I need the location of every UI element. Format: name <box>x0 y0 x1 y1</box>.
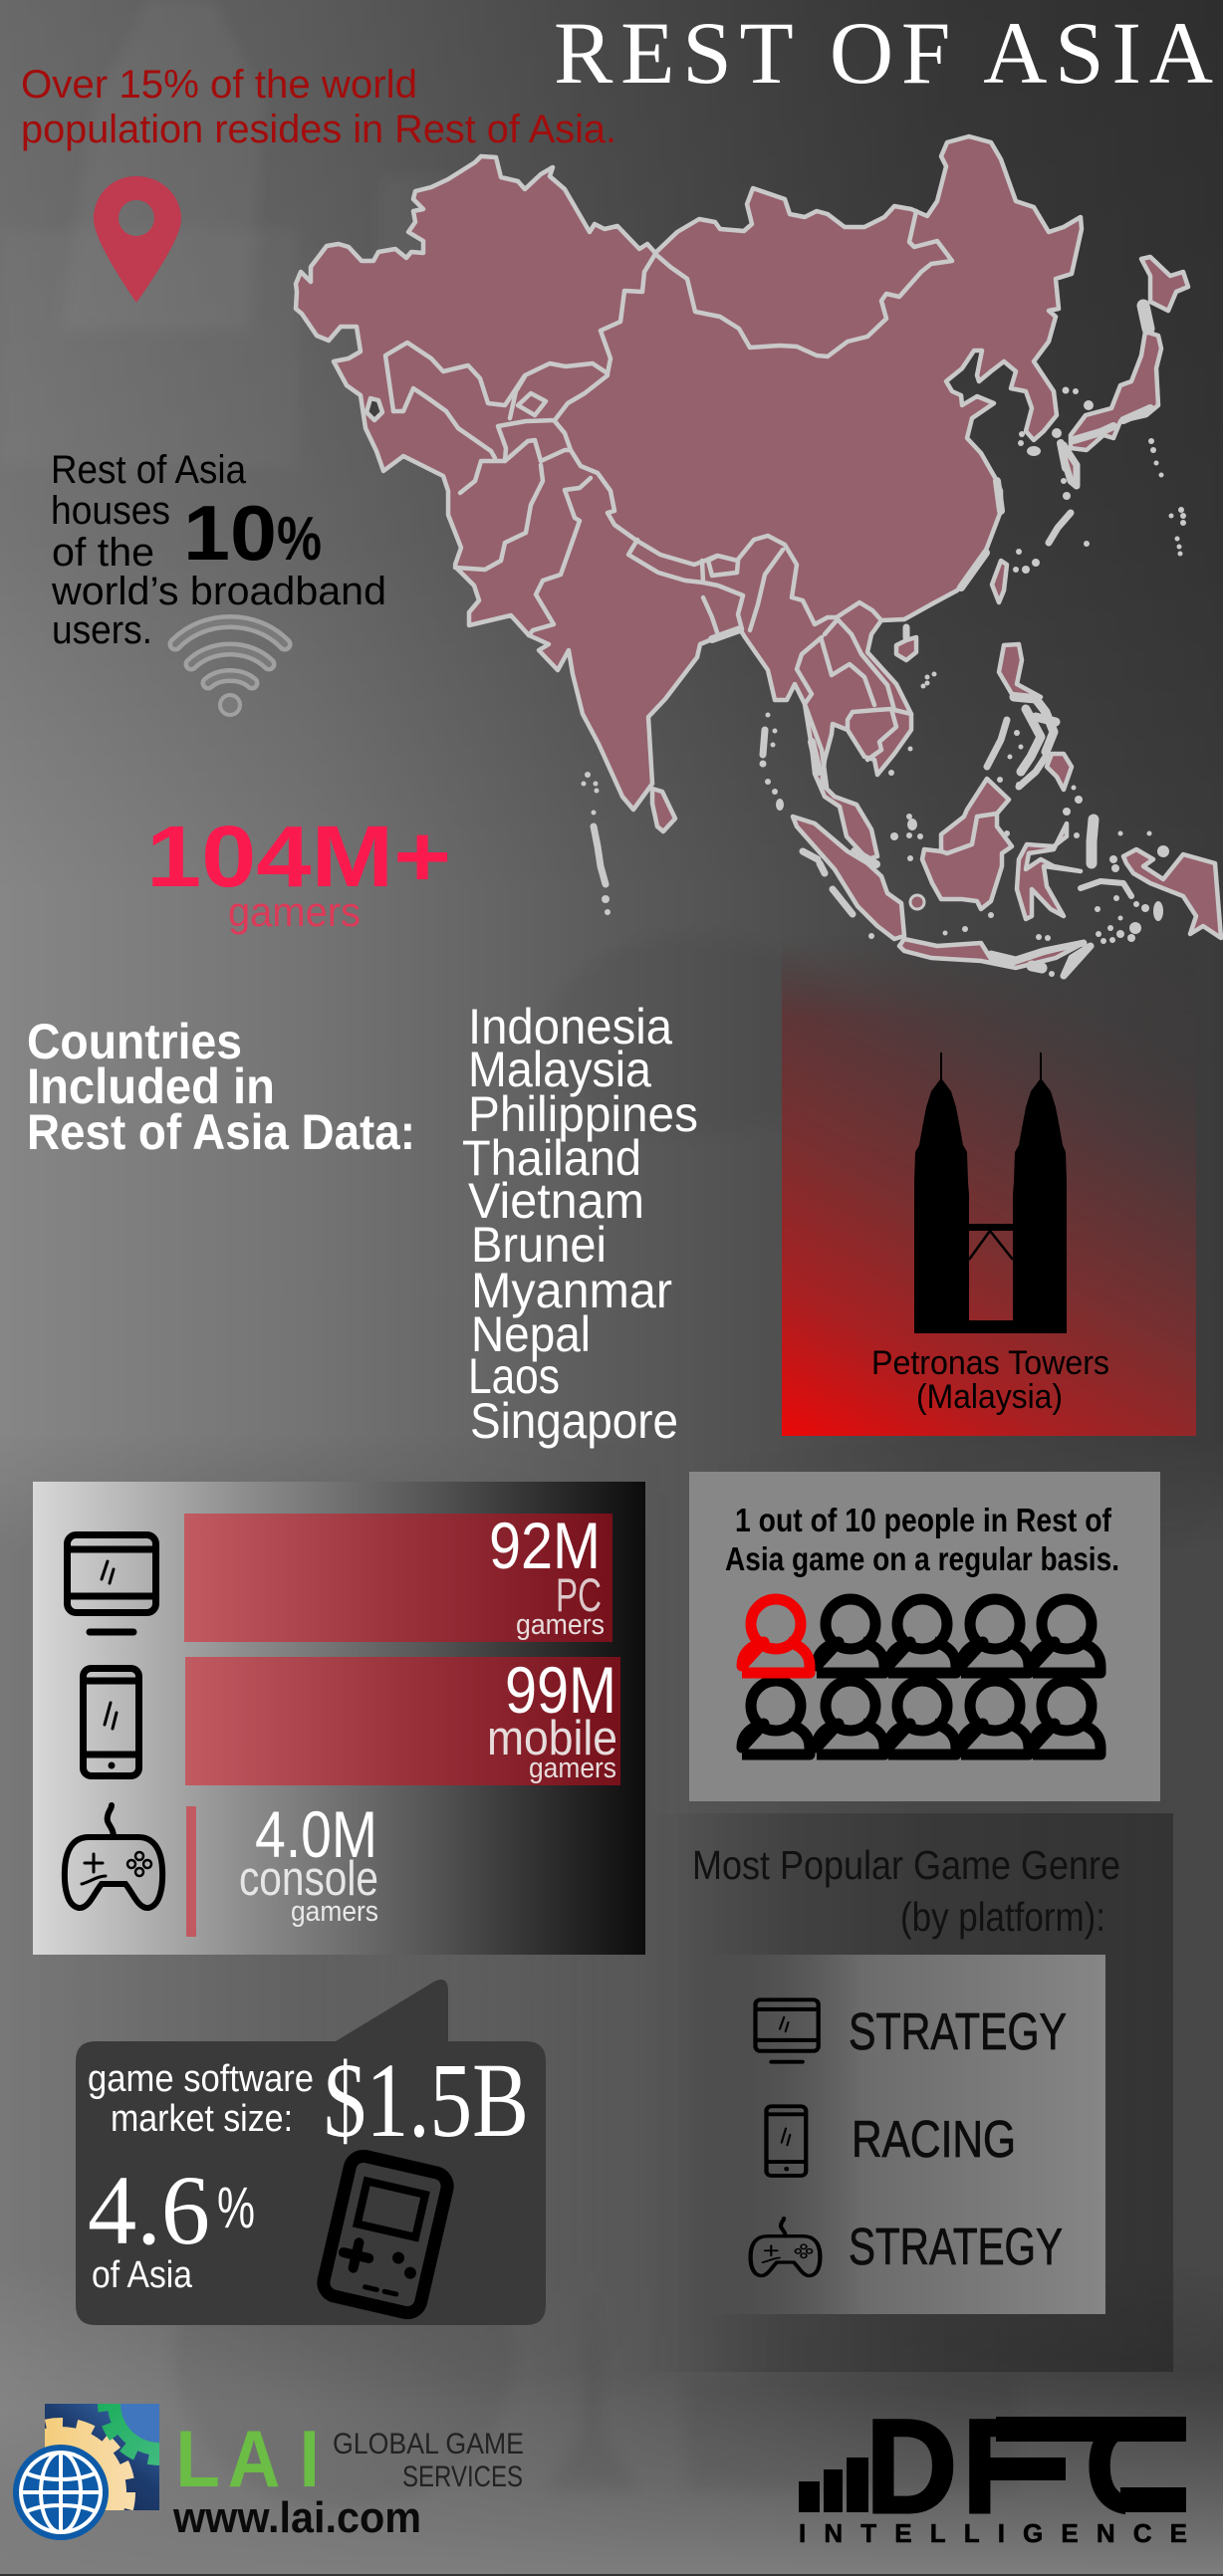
icon: wifi signal <box>175 621 285 715</box>
bar: PC gamers: gamers <box>516 1609 605 1641</box>
panel: gamers by platform <box>33 1482 645 1955</box>
map of Asia <box>296 136 1221 977</box>
icon: PC monitor small <box>755 1999 819 2062</box>
logo: LAI Global Game Services: GLOBAL GAME <box>333 2428 524 2460</box>
caption: Petronas Towers <box>871 1344 1109 1416</box>
bar: console gamers: 4.0M <box>255 1797 377 1871</box>
bar: PC gamers <box>184 1509 612 1642</box>
panel: game software market size <box>76 1980 546 2325</box>
text: market size label: market size: <box>111 2098 293 2140</box>
text block: broadband statistic: 10 <box>183 489 277 577</box>
logo: DFC Intelligence <box>799 2417 1187 2543</box>
text block: 1 out of 10: 1 out of 10 people in Rest of <box>735 1502 1112 1538</box>
statistic: 104M+ gamers: gamers <box>228 888 361 935</box>
statistic: 4.6% of Asia <box>88 2155 255 2296</box>
text block: population statistic: Over 15% of the world <box>21 63 417 107</box>
bar: PC gamers: 92M <box>489 1509 601 1582</box>
genre: PC strategy: STRATEGY <box>849 2003 1067 2061</box>
text block: broadband statistic: world’s broadband <box>51 570 386 613</box>
icon: handheld console <box>321 2154 450 2315</box>
bar: mobile gamers: mobile <box>487 1712 617 1765</box>
panel: most popular game genre <box>647 1813 1173 2372</box>
statistic: 104M+ gamers <box>146 809 451 935</box>
icon: phone <box>84 1669 139 1776</box>
logo: LAI Global Game Services: www.lai.com <box>172 2493 421 2542</box>
heading: most popular game genre: Most Popular Game Genre <box>692 1842 1120 1888</box>
text block: broadband statistic: users. <box>52 608 152 652</box>
logo: LAI Global Game Services: LAI <box>175 2414 320 2504</box>
title: REST OF ASIA <box>554 5 1213 103</box>
panel: red Petronas Towers backdrop <box>782 936 1196 1436</box>
logo: DFC Intelligence: DFC <box>865 2392 1177 2541</box>
heading: countries included: Countries <box>27 1014 242 1069</box>
icon: Petronas Towers <box>914 1053 1067 1333</box>
icon: gamepad small <box>751 2219 820 2275</box>
icon: phone small <box>766 2106 806 2176</box>
list of countries: Malaysia <box>468 1042 651 1097</box>
heading: most popular game genre <box>692 1842 1120 1940</box>
text block: population statistic <box>21 63 616 151</box>
bar: PC gamers: PC <box>556 1568 602 1621</box>
heading: countries included <box>27 1014 415 1160</box>
icon: location pin <box>94 176 181 303</box>
text block: broadband statistic: % <box>277 505 322 574</box>
panel: 1 out of 10 people <box>689 1472 1160 1801</box>
text block: broadband statistic: Rest of Asia <box>51 448 247 492</box>
text block: population statistic: population resides in Rest of Asia. <box>21 108 616 151</box>
text block: broadband statistic: of the <box>52 531 154 575</box>
bar: mobile gamers: 99M <box>505 1653 616 1727</box>
genre: console strategy: STRATEGY <box>849 2219 1063 2276</box>
list of countries: Singapore <box>470 1393 678 1449</box>
text block: 1 out of 10 <box>725 1502 1119 1577</box>
list of countries: Nepal <box>471 1306 591 1362</box>
icon: PC monitor <box>68 1535 155 1632</box>
list of countries: Laos <box>468 1348 560 1404</box>
text: market size label <box>88 2058 314 2140</box>
logo: LAI Global Game Services: SERVICES <box>402 2460 523 2493</box>
text block: broadband statistic <box>51 448 386 652</box>
bar: console gamers: console <box>239 1852 378 1906</box>
bar: console gamers: gamers <box>291 1896 378 1928</box>
list of countries <box>462 999 698 1449</box>
list of countries: Brunei <box>471 1217 607 1273</box>
list of countries: Vietnam <box>468 1173 644 1229</box>
logo: LAI Global Game Services <box>0 2348 524 2561</box>
statistic: 4.6% of Asia: % <box>217 2176 255 2240</box>
list of countries: Philippines <box>468 1086 698 1142</box>
list of countries: Myanmar <box>471 1263 672 1318</box>
genre: mobile racing: RACING <box>852 2111 1016 2169</box>
text block: broadband statistic: houses <box>51 489 170 533</box>
bar: mobile gamers <box>185 1653 620 1785</box>
heading: most popular game genre: (by platform): <box>900 1894 1105 1940</box>
statistic: 104M+ gamers: 104M+ <box>146 809 451 905</box>
icon: gamepad <box>65 1805 162 1908</box>
heading: countries included: Included in <box>27 1058 275 1114</box>
icon: grid of ten people <box>742 1599 1101 1755</box>
statistic: 4.6% of Asia: 4.6 <box>88 2155 210 2265</box>
bar: mobile gamers: gamers <box>529 1753 616 1784</box>
caption: Petronas Towers: Petronas Towers <box>871 1344 1109 1382</box>
logo: DFC Intelligence: INTELLIGENCE <box>799 2518 1187 2548</box>
list of countries: Thailand <box>462 1130 641 1186</box>
list of countries: Indonesia <box>468 999 672 1054</box>
statistic: 4.6% of Asia: of Asia <box>92 2254 193 2296</box>
caption: Petronas Towers: (Malaysia) <box>916 1378 1063 1416</box>
heading: countries included: Rest of Asia Data: <box>27 1104 415 1160</box>
icon: LAI gears and globe <box>13 2404 159 2540</box>
statistic: $1.5B: $1.5B <box>324 2042 529 2160</box>
bar: console gamers <box>186 1797 378 1937</box>
text: market size label: game software <box>88 2058 314 2100</box>
text block: 1 out of 10: Asia game on a regular basis. <box>725 1540 1119 1577</box>
